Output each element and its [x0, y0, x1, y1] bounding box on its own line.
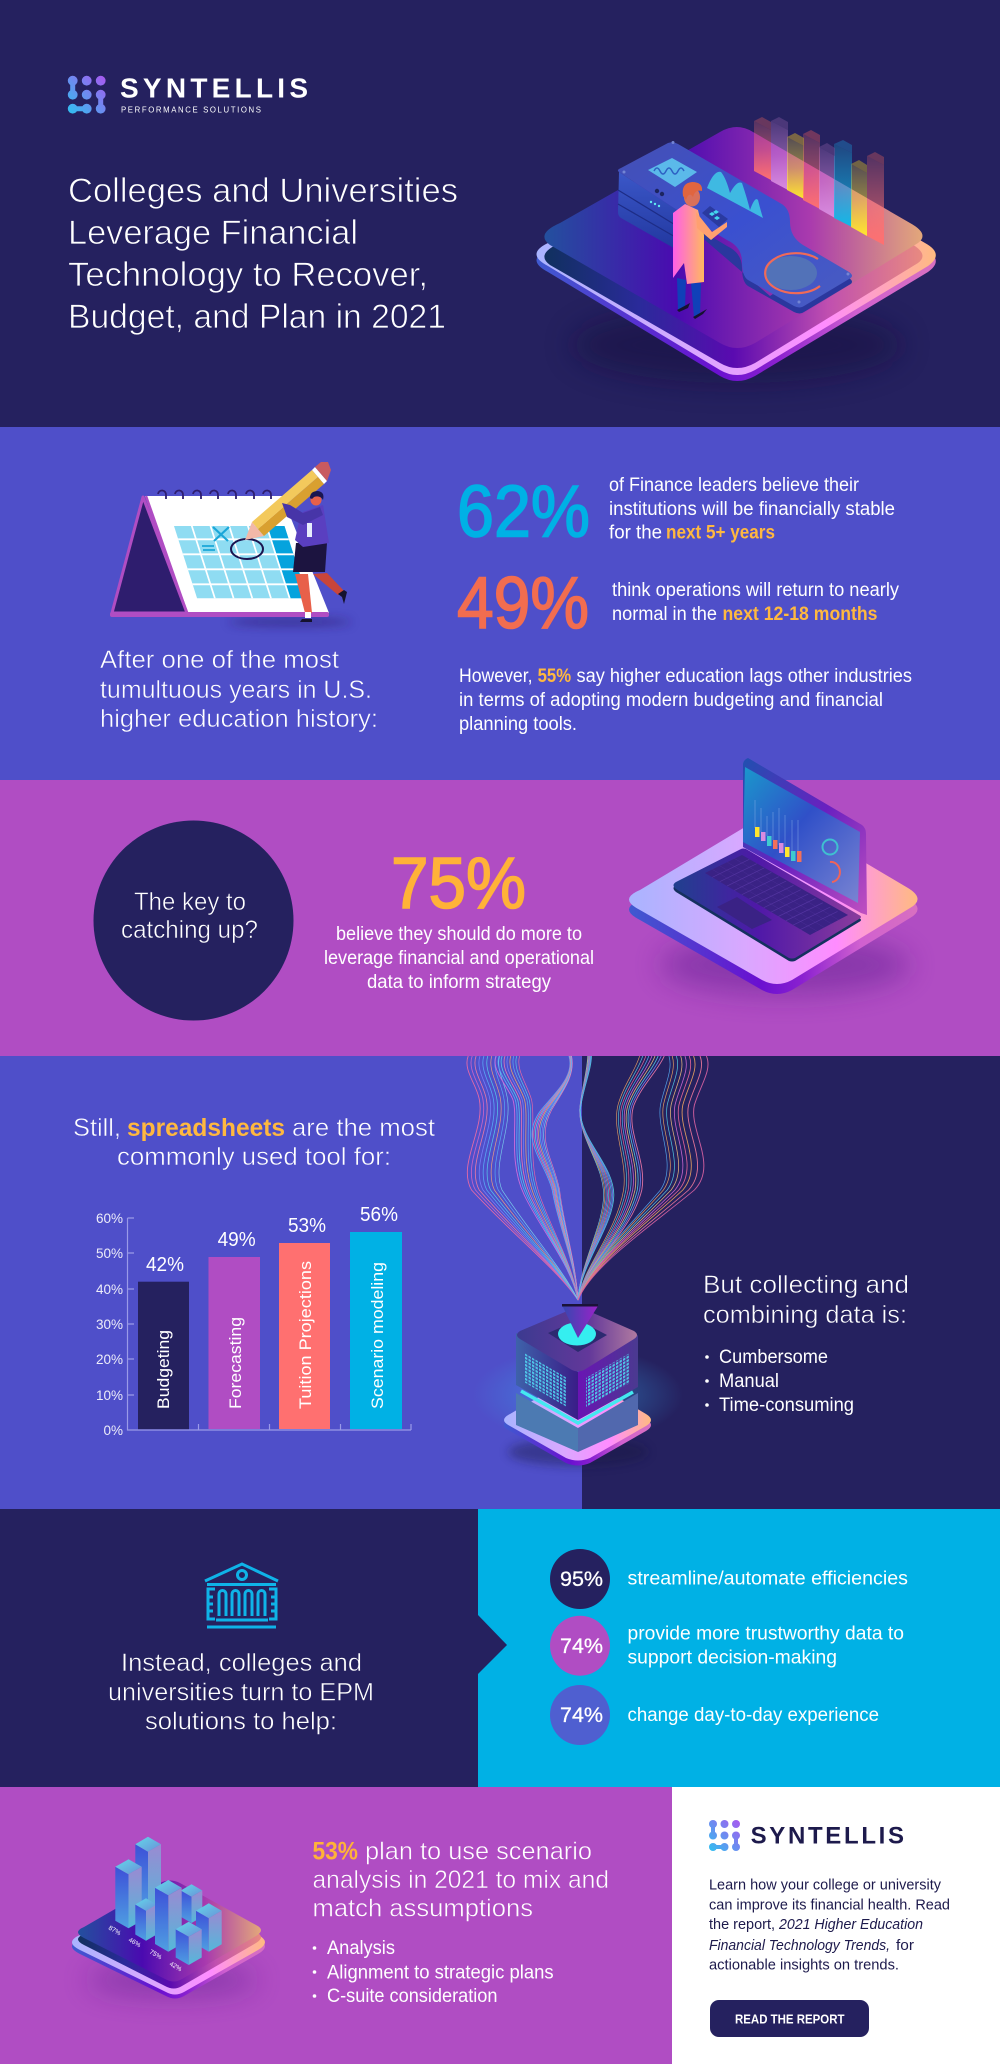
icon: institution building: [205, 1564, 278, 1627]
bar: forecasting: [208, 1229, 260, 1429]
list: scenario bullets: Analysis: [327, 1938, 395, 1959]
stat: 62%: for the: [609, 522, 662, 544]
text: collecting data is: Time-consuming: [719, 1395, 854, 1416]
text: 53% plan to use scenario analysis: analysis in 2021 to mix and: [312, 1866, 609, 1894]
stat: 75%: data to inform strategy: [367, 972, 551, 993]
text: collecting data is: combining data is:: [703, 1301, 907, 1329]
text: learn how: 2021 Higher Education: [778, 1916, 923, 1933]
text: 53% plan to use scenario analysis: 53%: [312, 1838, 358, 1866]
calendar grid: [174, 526, 308, 598]
chart: screen bars and dials: [755, 800, 840, 882]
bar: forecasting: 49%: [218, 1229, 256, 1251]
bar: budgeting: Budgeting: [155, 1330, 173, 1409]
text: learn how: actionable insights on trends.: [709, 1956, 899, 1973]
text: learn how: Learn how your college or university: [709, 1877, 941, 1894]
stat: 74% trustworthy data: provide more trustworthy data to: [628, 1624, 904, 1645]
bar: forecasting: Forecasting: [227, 1317, 245, 1409]
callout: the key circle: catching up?: [121, 916, 258, 944]
panel: key to catching up: [0, 758, 1000, 1056]
text: 55% lag note: However,: [459, 666, 532, 687]
y axis labels: 0%: [103, 1423, 123, 1438]
y axis labels: 30%: [96, 1317, 123, 1332]
y axis labels: 40%: [96, 1282, 123, 1297]
text: after one of the most tumultuous years: higher education history:: [100, 705, 378, 733]
text: collecting data is: Manual: [719, 1371, 779, 1392]
stat: 62%: next 5+ years: [666, 522, 775, 544]
text: instead colleges: solutions to help:: [145, 1708, 337, 1736]
list: scenario bullets: Alignment to strategic plans: [327, 1962, 554, 1983]
title: Colleges and Universities: [68, 172, 458, 210]
axis labels: 46%: [127, 1937, 142, 1949]
text: 53% plan to use scenario analysis: match assumptions: [312, 1894, 533, 1922]
logo: Syntellis dark: [709, 1820, 904, 1851]
axis labels: 42%: [168, 1961, 183, 1973]
figure: woman: [282, 491, 347, 622]
stat: 49%: think operations will return to nearly: [612, 580, 899, 601]
button: read the report: READ THE REPORT: [735, 2011, 845, 2026]
heading: spreadsheets: [73, 1114, 435, 1171]
axis labels: 87%: [107, 1925, 122, 1937]
device: server and control band: [618, 141, 852, 314]
icon: pencil: [245, 462, 331, 540]
stat: 62%: 62%: [457, 472, 590, 552]
stat: 75%: leverage financial and operational: [324, 948, 594, 969]
text: learn how: Financial Technology Trends,: [709, 1937, 890, 1954]
text: instead colleges: [108, 1649, 374, 1736]
heading: spreadsheets: commonly used tool for:: [117, 1143, 391, 1171]
stat: 74% day-to-day: change day-to-day experience: [628, 1705, 879, 1726]
figure: analyst with tablet: [673, 182, 728, 319]
stat: 62%: institutions will be financially stable: [609, 499, 895, 520]
text: 55% lag note: planning tools.: [459, 714, 577, 735]
text: after one of the most tumultuous years: tumultuous years in U.S.: [100, 676, 372, 704]
stat: 75%: 75%: [391, 844, 526, 924]
stat: 74% trustworthy data: [550, 1616, 904, 1676]
panel: EPM solutions: [0, 1509, 1000, 1787]
bar: scenario modeling: [350, 1204, 402, 1429]
list: scenario bullets: C-suite consideration: [327, 1986, 498, 2007]
stat: 74% day-to-day: 74%: [560, 1704, 603, 1727]
stat: 75%: believe they should do more to: [336, 924, 582, 945]
stat: 62%: [457, 472, 895, 552]
text: instead colleges: universities turn to EPM: [108, 1679, 374, 1707]
heading: spreadsheets: spreadsheets: [127, 1114, 285, 1142]
stat: 49%: [457, 563, 899, 644]
stat: 74% trustworthy data: 74%: [560, 1635, 603, 1658]
text: 55% lag note: 55%: [538, 666, 571, 687]
bar: budgeting: 42%: [146, 1254, 184, 1276]
bar: scenario modeling: 56%: [360, 1204, 398, 1226]
arrow: [478, 1615, 507, 1674]
y axis labels: 10%: [96, 1388, 123, 1403]
axis labels: [107, 1925, 183, 1973]
bar: tuition projections: Tuition Projections: [297, 1261, 315, 1409]
panel: spreadsheets chart: [0, 1056, 1000, 1509]
bar: tuition projections: 53%: [288, 1215, 326, 1237]
text: collecting data is: [703, 1271, 909, 1416]
text: 55% lag note: in terms of adopting modern budgeting and financial: [459, 690, 883, 711]
callout: the key circle: The key to: [134, 888, 246, 916]
stat: 62%: of Finance leaders believe their: [609, 475, 860, 496]
panel: call to action: [672, 1787, 1000, 2064]
logo: Syntellis dark: SYNTELLIS: [751, 1822, 904, 1850]
text: instead colleges: Instead, colleges and: [121, 1649, 362, 1677]
stat: 49%: normal in the: [612, 604, 717, 625]
button: read the report: [710, 2000, 869, 2037]
bar chart: tool use: [96, 1204, 411, 1438]
text: after one of the most tumultuous years: [100, 646, 378, 733]
text: after one of the most tumultuous years: After one of the most: [100, 646, 339, 674]
panel: outlook stats: [0, 427, 1000, 780]
text: learn how: for: [896, 1937, 914, 1954]
text: 53% plan to use scenario analysis: [312, 1838, 609, 1922]
text: collecting data is: But collecting and: [703, 1271, 909, 1299]
text: 55% lag note: say higher education lags other industries: [576, 666, 912, 687]
text: learn how: the report,: [709, 1916, 775, 1933]
y axis labels: [96, 1211, 123, 1438]
y axis labels: 20%: [96, 1352, 123, 1367]
panel: hero: [0, 0, 1000, 427]
chart: translucent bars: [754, 117, 884, 245]
bar boxes: [115, 1837, 222, 1965]
bar: scenario modeling: Scenario modeling: [369, 1262, 387, 1409]
illustration: data cube: [473, 1304, 683, 1466]
stat: 49%: 49%: [457, 563, 589, 644]
stat: 74% day-to-day: [550, 1685, 879, 1745]
stat: 74% trustworthy data: support decision-making: [628, 1648, 837, 1669]
callout: the key circle: [94, 820, 294, 1020]
stat: 95%: streamline/automate efficiencies: [628, 1568, 908, 1590]
y axis labels: 60%: [96, 1211, 123, 1226]
text: learn how: can improve its financial health. Read: [709, 1896, 950, 1913]
title: Technology to Recover,: [68, 256, 428, 294]
bar: tuition projections: [279, 1215, 330, 1429]
illustration: isometric analytics platform: [536, 117, 936, 383]
illustration: isometric bar chart: [72, 1837, 265, 1998]
stat: 95%: 95%: [560, 1568, 603, 1591]
list: scenario bullets: [313, 1938, 554, 2007]
text: 55% lag note: [459, 666, 912, 735]
title: [68, 172, 458, 336]
stat: 75%: [324, 844, 594, 993]
illustration: data streams: [467, 1056, 708, 1300]
logo: Syntellis: PERFORMANCE SOLUTIONS: [121, 105, 261, 114]
text: collecting data is: Cumbersome: [719, 1347, 828, 1368]
axis labels: 75%: [148, 1949, 163, 1961]
stat: 49%: next 12-18 months: [722, 604, 878, 625]
text: learn how: [709, 1877, 950, 1973]
illustration: laptop on platform: [629, 758, 918, 995]
title: Budget, and Plan in 2021: [68, 298, 446, 336]
heading: spreadsheets: are the most: [292, 1114, 435, 1142]
bar: budgeting: [138, 1254, 189, 1429]
icon: logo dots: [68, 76, 106, 114]
stat: 95%: [550, 1549, 908, 1609]
illustration: calendar with person: [110, 462, 352, 626]
heading: spreadsheets: Still,: [73, 1114, 121, 1142]
title: Leverage Financial: [68, 214, 358, 252]
icon: spiral rings: [158, 490, 271, 499]
logo: Syntellis: [68, 72, 308, 114]
y axis labels: 50%: [96, 1246, 123, 1261]
text: 53% plan to use scenario analysis: plan to use scenario: [365, 1838, 592, 1866]
logo: Syntellis: SYNTELLIS: [120, 72, 308, 103]
panel: scenario analysis: [0, 1787, 672, 2064]
